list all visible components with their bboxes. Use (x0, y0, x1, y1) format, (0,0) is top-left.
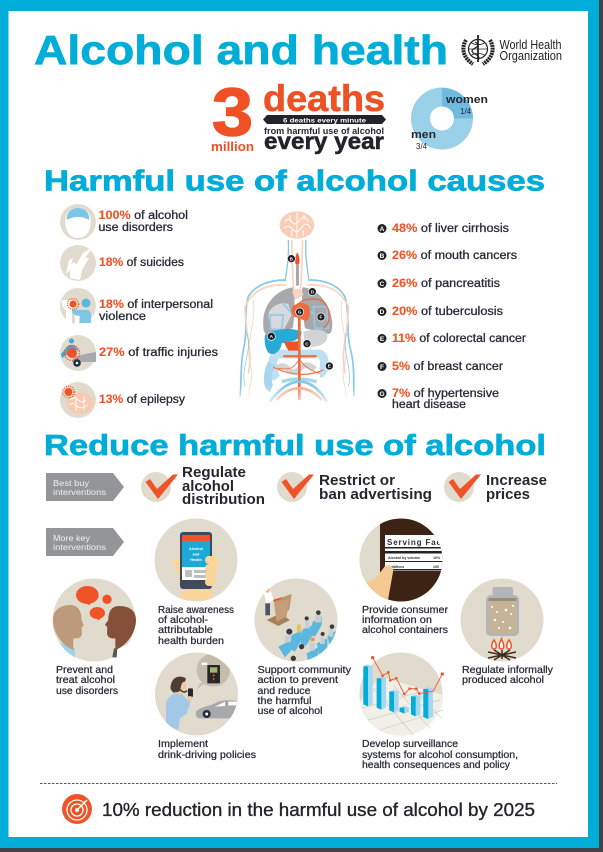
arrow tag: more key interventions (46, 528, 124, 556)
headline: 3 million deaths: every year (264, 128, 384, 154)
best buy: restrict advertising (277, 472, 432, 503)
illustration: serving facts label: 100 (433, 565, 439, 569)
best buy: regulate distribution: Regulate (182, 464, 246, 481)
donut chart: women and men: 3/4 (416, 142, 428, 151)
headline: 3 million deaths: deaths (263, 78, 385, 119)
intervention: community action (254, 578, 351, 717)
caption (362, 605, 449, 636)
caption: Support community (258, 665, 351, 676)
best buy: restrict advertising: ban advertising (319, 486, 432, 503)
caption: of alcohol- (158, 615, 208, 626)
goal callout (62, 794, 535, 824)
body markers A to G (267, 255, 333, 370)
body illustration (233, 211, 360, 408)
illustration: serving facts label: 10% (433, 556, 441, 560)
best buy: increase prices (444, 472, 547, 503)
intervention: raise awareness (154, 518, 238, 647)
caption: and reduce (258, 686, 311, 697)
item A: liver cirrhosis: A (380, 226, 385, 233)
icon: target (62, 794, 92, 824)
item: suicides: 18% of suicides (99, 257, 184, 269)
body markers A to G: B (290, 256, 294, 261)
caption: alcohol containers (362, 625, 448, 636)
illustration: jar over fire (460, 578, 544, 662)
item A: liver cirrhosis: 48% of liver cirrhosis (392, 223, 509, 235)
item D: tuberculosis: D (380, 309, 385, 316)
organ: colon and intestines (268, 354, 324, 388)
donut chart: women and men: 1/4 (460, 107, 472, 116)
caption: health burden (158, 636, 224, 647)
illustration: serving facts label (360, 515, 443, 605)
organ: pancreas (284, 341, 299, 351)
headline: 3 million deaths: million (211, 140, 254, 154)
best buy: restrict advertising: Restrict or (319, 472, 395, 489)
item F: breast cancer: 5% of breast cancer (392, 361, 503, 373)
item D: tuberculosis: 20% of tuberculosis (392, 306, 503, 318)
caption: action to prevent (258, 675, 338, 686)
item E: colorectal cancer: E (380, 336, 385, 343)
body markers A to G: C (305, 341, 309, 346)
illustration: serving facts label: Serving Fac (387, 538, 442, 547)
illustration: two heads talking (52, 578, 136, 661)
organ: liver (265, 329, 302, 354)
donut chart: women and men: men (411, 129, 436, 141)
caption: Regulate informally (462, 665, 553, 676)
caption: the harmful (258, 696, 312, 707)
caption: Prevent and (56, 665, 113, 676)
goal text: 10% reduction in the harmful use of alcohol by 2025 (102, 799, 535, 820)
intervention: prevent and treat (52, 578, 136, 697)
title: Alcohol and health (34, 27, 448, 73)
caption: health consequences and policy (362, 760, 510, 771)
illustration: serving facts label: Alcohol by volume (388, 556, 420, 560)
item C: pancreatitis: 26% of pancreatitis (392, 278, 500, 290)
caption: produced alcohol (462, 675, 544, 686)
intervention: informally produced alcohol (460, 578, 553, 686)
best buy: regulate distribution (141, 464, 265, 508)
body markers A to G: E (328, 364, 331, 369)
body markers A to G: D (311, 289, 315, 294)
item: suicides (60, 245, 184, 281)
heading: reduce: Reduce harmful use of alcohol (44, 430, 546, 462)
item: alcohol use disorders: use disorders (98, 222, 173, 234)
organ: trachea and mouth (295, 252, 300, 286)
caption (258, 665, 351, 717)
illustration: speaker and audience (254, 578, 338, 665)
headline: 3 million deaths: 6 deaths every minute (283, 118, 366, 124)
heart and aorta (270, 289, 329, 402)
arrow tag: best buy interventions: Best buy (53, 478, 90, 488)
arrow tag: best buy interventions: interventions (53, 487, 106, 497)
item: traffic injuries: 27% of traffic injuries (99, 347, 218, 359)
intervention: surveillance systems (359, 652, 518, 771)
item: interpersonal violence: violence (99, 311, 146, 323)
body markers A to G: A (270, 334, 274, 339)
heading: causes: Harmful use of alcohol causes (44, 166, 545, 198)
item G: hypertensive heart disease: G (379, 391, 385, 398)
item G: hypertensive heart disease (378, 388, 499, 411)
best buy: regulate distribution: alcohol (182, 478, 234, 495)
illustration: breathalyser test (155, 652, 240, 736)
item: interpersonal violence: 18% of interpersonal (99, 299, 213, 311)
illustration: phone in hand: Alcohol (189, 547, 203, 551)
item G: hypertensive heart disease: heart disease (392, 399, 466, 411)
caption: Provide consumer (362, 605, 449, 616)
WHO logo (463, 35, 562, 64)
caption: attributable (158, 625, 213, 636)
arrow tag: more key interventions: More key (53, 533, 91, 543)
headline: 3 million deaths: 3 (212, 74, 253, 150)
best buy: increase prices: Increase (486, 472, 547, 489)
icon: WHO emblem (463, 35, 493, 64)
organ: lungs (263, 287, 332, 334)
donut chart: women and men: women (445, 94, 488, 106)
caption: systems for alcohol consumption, (362, 750, 518, 761)
intervention: consumer information (360, 515, 449, 636)
caption: Implement (158, 739, 208, 750)
caption: treat alcohol (56, 675, 115, 686)
illustration: serving facts label: Additives (388, 565, 404, 569)
caption: Develop surveillance (362, 739, 458, 750)
item: epilepsy (60, 382, 185, 418)
item G: hypertensive heart disease: 7% of hypertensive (392, 388, 499, 400)
item F: breast cancer: F (380, 364, 384, 371)
item E: colorectal cancer: 11% of colorectal cancer (392, 333, 526, 345)
WHO wordmark: Organization (500, 49, 562, 63)
headline: 3 million deaths (211, 74, 386, 154)
illustration: phone in hand (154, 518, 238, 602)
item: alcohol use disorders: 100% of alcohol (98, 210, 188, 222)
item: epilepsy: 13% of epilepsy (99, 394, 185, 406)
caption: information on (362, 615, 432, 626)
caption (362, 739, 518, 771)
arrow tag: more key interventions: interventions (53, 542, 106, 552)
caption (462, 665, 553, 686)
intervention: drink-driving (155, 652, 256, 761)
item: traffic injuries (60, 335, 218, 371)
best buy: regulate distribution: distribution (182, 491, 265, 508)
organ: brain (280, 211, 314, 239)
item B: mouth cancers: 26% of mouth cancers (392, 250, 517, 262)
arrow tag: best buy interventions (46, 473, 124, 501)
item: alcohol use disorders (60, 204, 188, 240)
item B: mouth cancers: B (380, 253, 385, 260)
organ: stomach (303, 329, 327, 347)
caption (158, 605, 234, 647)
best buy: increase prices: prices (486, 486, 530, 503)
caption: use of alcohol (258, 706, 322, 717)
illustration: bar chart with trend line (359, 652, 444, 736)
caption (56, 665, 118, 697)
caption (158, 739, 256, 761)
illustration: phone in hand: and (193, 552, 200, 556)
caption: drink-driving policies (158, 750, 256, 761)
body markers A to G: G (298, 310, 302, 315)
panel: left list of harms (60, 204, 218, 418)
vessels (240, 240, 354, 397)
body markers A to G: F (320, 315, 323, 320)
illustration: phone in hand: Health (190, 558, 202, 562)
WHO wordmark: World Health (500, 38, 562, 52)
headline: 3 million deaths: from harmful use of alcohol (264, 126, 384, 136)
donut chart: women and men (411, 88, 488, 151)
panel: right list of diseases (378, 223, 526, 411)
item: interpersonal violence (60, 288, 213, 324)
WHO wordmark (500, 38, 562, 63)
item C: pancreatitis: C (380, 281, 385, 288)
caption: Raise awareness (158, 605, 234, 616)
caption: use disorders (56, 686, 118, 697)
